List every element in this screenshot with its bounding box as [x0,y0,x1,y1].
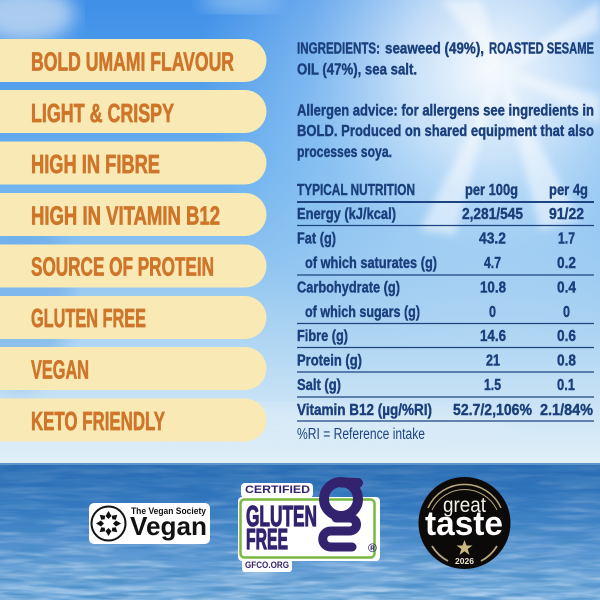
text block: allergen advice [297,102,594,161]
row: salt [297,377,575,394]
row: carbohydrate: Carbohydrate (g) [297,280,400,296]
row: fibre [297,328,576,345]
claim: vegan [0,347,266,390]
row: vitamin B12 [297,402,593,419]
background: sea [0,463,600,600]
row: saturates: of which saturates (g) [305,255,437,272]
row: carbohydrate: 10.8 [480,280,506,296]
row: protein: Protein (g) [297,352,362,370]
badge: certified gluten free: GLUTEN [246,501,317,533]
claim: high in fibre [0,142,266,184]
badge: The Vegan Society Vegan: Vegan [130,511,207,541]
row: sugars: 0 [563,304,570,321]
badge: great taste 2026 [418,477,510,569]
row: vitamin B12: 52.7/2,106% [453,402,532,419]
claim: source of protein: SOURCE OF PROTEIN [31,254,214,282]
row: salt: 0.1 [557,377,575,394]
claim: light and crispy: LIGHT & CRISPY [31,100,174,128]
badge: The Vegan Society Vegan: The Vegan Society [131,506,207,517]
claim: gluten free [0,296,266,339]
row: fat [297,230,575,248]
row: salt: 1.5 [484,377,501,394]
background: sunny sky [0,0,600,465]
row: fibre: Fibre (g) [297,328,348,345]
row: saturates: 4.7 [484,255,501,272]
row: salt: Salt (g) [297,377,341,394]
row: fat: 1.7 [558,230,575,248]
text block: allergen advice: processes soya. [297,144,392,161]
row: saturates [305,255,576,272]
row: protein: 21 [486,352,500,370]
row: sugars [305,304,570,321]
table header [297,182,588,199]
panel: product claims [0,39,266,442]
claim: keto friendly: KETO FRIENDLY [31,408,165,436]
text block: ingredients: OIL (47%), sea salt. [297,62,417,78]
row: energy: 91/22 [549,206,584,223]
row: vitamin B12: 2.1/84% [540,402,593,419]
badge: great taste 2026: great [443,494,486,517]
claim: light and crispy [0,90,266,133]
badge: certified gluten free: GFCO.ORG [245,560,289,571]
table header: TYPICAL NUTRITION [297,182,415,199]
row: fat: 43.2 [479,230,506,248]
icon: purple g mark [323,482,358,547]
footnote: reference intake: %RI = Reference intake [297,426,425,443]
row: sugars: of which sugars (g) [305,304,420,321]
row: fat: Fat (g) [297,230,336,248]
row: fibre: 14.6 [480,328,506,345]
claim: high in vitamin B12: HIGH IN VITAMIN B12 [31,202,220,230]
text block: ingredients: INGREDIENTS: [297,40,380,58]
row: fibre: 0.6 [557,328,576,345]
nutrition table [297,182,594,443]
claim: source of protein [0,244,266,288]
badge: great taste 2026: taste [425,505,503,543]
claim: gluten free: GLUTEN FREE [31,305,146,333]
badge: great taste 2026: 2026 [455,556,474,566]
badge: certified gluten free: ® [368,541,377,555]
claim: high in vitamin B12 [0,193,266,236]
row: protein [297,352,576,370]
row: saturates: 0.2 [557,255,576,272]
text block: ingredients: seaweed (49%), [385,40,484,58]
claim: bold umami flavour: BOLD UMAMI FLAVOUR [31,48,234,76]
row: energy [297,206,584,223]
badge: The Vegan Society Vegan [89,503,210,544]
icon: gold star [456,540,472,555]
row: energy: Energy (kJ/kcal) [297,206,396,223]
claim: bold umami flavour [0,39,266,82]
claim: high in fibre: HIGH IN FIBRE [31,151,160,179]
row: carbohydrate: 0.4 [557,280,576,296]
badge: certified gluten free: CERTIFIED [245,484,310,496]
table header: per 100g [465,182,518,199]
badge: certified gluten free: FREE [246,524,288,556]
row: carbohydrate [297,280,576,296]
row: vitamin B12: Vitamin B12 (µg/%RI) [297,402,432,419]
claim: keto friendly [0,398,266,442]
badge: certified gluten free [238,482,380,572]
row: protein: 0.8 [557,352,576,370]
table header: per 4g [549,182,588,199]
row: energy: 2,281/545 [462,206,523,223]
row: sugars: 0 [489,304,496,321]
text block: ingredients [297,40,594,78]
claim: vegan: VEGAN [31,356,89,384]
